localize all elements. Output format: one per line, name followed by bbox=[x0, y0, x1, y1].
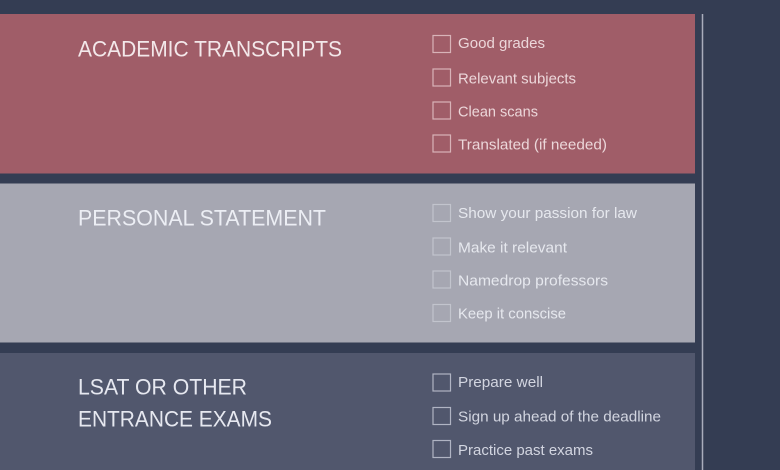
checklist: LSAT or other entrance exams: Practice past exams bbox=[458, 442, 593, 459]
checklist: personal statement: Namedrop professors bbox=[458, 272, 608, 290]
checklist: personal statement bbox=[433, 204, 637, 322]
checklist: personal statement: Keep it conscise bbox=[458, 306, 566, 322]
checklist: LSAT or other entrance exams: Prepare well bbox=[458, 374, 543, 391]
checklist: LSAT or other entrance exams: Sign up ahead of the deadline bbox=[458, 408, 661, 426]
panel: personal statement bbox=[0, 184, 695, 342]
checklist: academic transcripts: Translated (if needed) bbox=[458, 136, 607, 154]
checklist: academic transcripts: Good grades bbox=[458, 35, 545, 52]
heading: personal statement: PERSONAL STATEMENT bbox=[78, 206, 326, 230]
checklist: LSAT or other entrance exams bbox=[433, 374, 661, 459]
checklist: personal statement: Show your passion for law bbox=[458, 205, 637, 222]
checklist: academic transcripts: Relevant subjects bbox=[458, 70, 576, 88]
panel: academic transcripts bbox=[0, 14, 695, 174]
heading: LSAT or other entrance exams: ENTRANCE EXAMS bbox=[78, 406, 272, 432]
checklist: personal statement: Make it relevant bbox=[458, 240, 568, 256]
heading: academic transcripts: ACADEMIC TRANSCRIPTS bbox=[78, 36, 342, 62]
checklist: academic transcripts bbox=[433, 35, 607, 154]
heading: LSAT or other entrance exams: LSAT OR OTHER bbox=[78, 374, 247, 400]
panel: LSAT or other entrance exams bbox=[0, 353, 695, 470]
checklist: academic transcripts: Clean scans bbox=[458, 104, 538, 120]
